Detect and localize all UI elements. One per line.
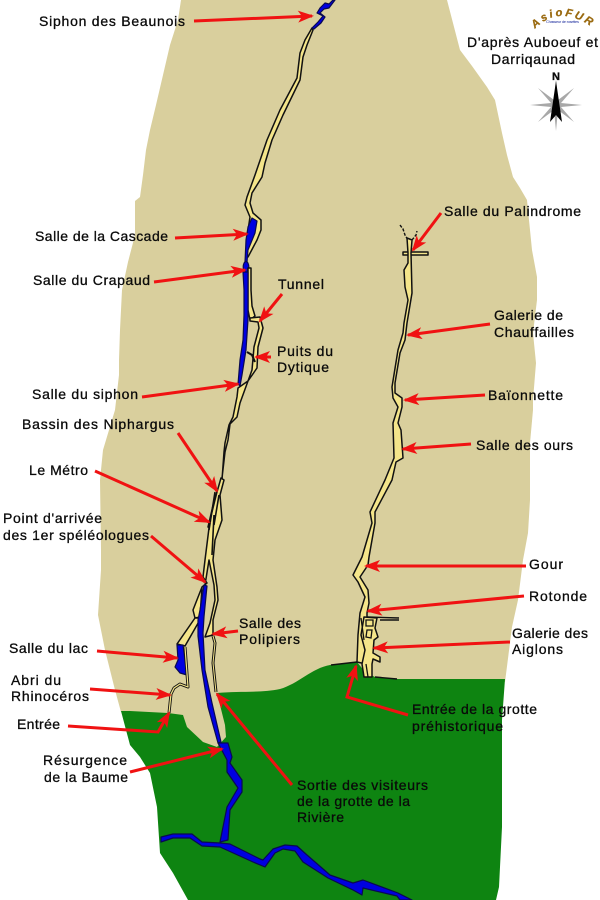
arrow: Tunnel — [260, 294, 282, 321]
green valley floor — [121, 662, 505, 900]
salle de la Cascade water — [245, 218, 257, 262]
arrow: Puits du Dytique — [256, 356, 271, 358]
aiglons inner walls — [361, 618, 373, 677]
palindrome crossbar — [403, 252, 428, 255]
label: Salle des ours: Salle des ours — [476, 437, 573, 453]
arrow: Galerie de Chauffailles — [408, 324, 490, 335]
arrow: Salle du Palindrome — [413, 213, 441, 250]
label: Entrée de la grotte préhistorique: préhistorique — [412, 718, 503, 734]
label: Salle des Polipiers: Salle des — [239, 615, 301, 631]
label: Salle des Polipiers: Polipiers — [239, 631, 300, 647]
label: Sortie des visiteurs: Rivière — [297, 809, 344, 825]
label: Galerie des Aiglons — [512, 625, 588, 657]
logo: Chasseur de rosettes — [546, 19, 579, 24]
label: Entrée de la grotte préhistorique — [412, 701, 537, 734]
label: Galerie des Aiglons: Galerie des — [512, 625, 588, 641]
arrow: Gour — [366, 564, 526, 568]
credit text — [467, 34, 598, 67]
arrow: Baïonnette — [405, 395, 485, 400]
lower right passage — [213, 636, 216, 692]
arrow: Abri du Rhinocéros — [90, 689, 170, 695]
label: Résurgence de la Baume — [43, 752, 128, 785]
icon: north compass — [530, 71, 582, 131]
label: Rotonde: Rotonde — [529, 588, 587, 604]
arrow: Résurgence — [130, 749, 222, 772]
label: Galerie de Chauffailles: Galerie de — [494, 307, 563, 323]
passage to salle du lac — [177, 618, 201, 646]
arrow: Sortie des visiteurs — [217, 694, 292, 785]
river outside the cave — [161, 743, 412, 900]
label: Résurgence de la Baume: de la Baume — [44, 769, 128, 785]
icon: north compass: N — [552, 71, 560, 83]
arrow: Point d'arrivée — [151, 536, 205, 582]
gallery wall bar — [367, 617, 399, 620]
label: Puits du Dytique: Dytique — [277, 359, 329, 375]
label: Gour: Gour — [529, 556, 563, 572]
label: Point d'arrivée: des 1er spéléologues — [3, 527, 149, 543]
puits du Dytique branch — [247, 352, 255, 362]
credit text: D'après Auboeuf et — [467, 34, 598, 50]
arrow: Siphon des Beaunois — [194, 16, 312, 21]
arrows — [68, 16, 526, 785]
arrow: Salle du lac — [97, 651, 177, 658]
label: Galerie de Chauffailles: Chauffailles — [494, 324, 574, 340]
label: Sortie des visiteurs: de la grotte de la — [297, 793, 410, 809]
label: Sortie des visiteurs: Sortie des visiteurs — [297, 777, 428, 793]
cave wall detail at le Métro — [209, 492, 219, 555]
label: Sortie des visiteurs — [297, 777, 428, 825]
label: Le Métro: Le Métro — [29, 462, 88, 478]
arrow: Salle des ours — [403, 444, 471, 449]
label: Résurgence de la Baume: Résurgence — [43, 752, 127, 768]
label: Abri du Rhinocéros: Abri du — [11, 672, 61, 688]
upper gallery — [245, 28, 313, 257]
arrow: Salle du siphon — [142, 384, 238, 397]
gallery by the siphon — [248, 268, 255, 320]
salle du Palindrome branches — [400, 225, 417, 240]
credit text: Darriqaunad — [491, 51, 575, 67]
label: Baïonnette: Baïonnette — [488, 387, 563, 403]
label: Tunnel: Tunnel — [278, 276, 324, 292]
label: Salle de la Cascade: Salle de la Cascade — [35, 228, 168, 244]
résurgence and tributary — [218, 743, 242, 842]
cave system: grotte de la Rivière — [169, 0, 335, 743]
label: Salle du lac: Salle du lac — [9, 640, 88, 656]
label: Abri du Rhinocéros — [11, 672, 89, 704]
arrow: Entrée de la grotte préhistorique — [347, 666, 408, 715]
label: Salle du siphon: Salle du siphon — [32, 386, 138, 402]
entrance passage and abri du Rhinocéros — [169, 647, 188, 713]
arrow: Rotonde — [368, 596, 524, 611]
label: Galerie de Chauffailles — [494, 307, 574, 340]
cave entrance lines — [331, 662, 397, 679]
label: Entrée de la grotte préhistorique: Entrée de la grotte — [412, 701, 537, 717]
cave system: grotte préhistorique — [331, 225, 428, 679]
label: Point d'arrivée: Point d'arrivée — [3, 510, 102, 526]
lower twin galleries — [193, 478, 224, 637]
main river — [161, 834, 412, 900]
label: Salle du Crapaud: Salle du Crapaud — [33, 272, 150, 288]
siphon des Beaunois water — [312, 0, 335, 29]
arrow: Salle du Crapaud — [154, 270, 245, 282]
logo: AsioFUR — [532, 8, 594, 30]
label: Siphon des Beaunois: Siphon des Beaunois — [39, 13, 185, 29]
salle du Crapaud water — [243, 262, 249, 272]
tunnel loop — [208, 317, 263, 528]
arrow: Salle de la Cascade — [175, 234, 247, 238]
arrow: Le Métro — [95, 471, 209, 522]
arrow: Galerie des Aiglons — [374, 642, 510, 648]
galerie des Aiglons — [361, 617, 380, 677]
plateau background — [98, 0, 537, 760]
label: Bassin des Niphargus: Bassin des Niphargus — [22, 416, 174, 432]
underground river — [198, 585, 221, 743]
siphon water — [238, 272, 248, 386]
label: Puits du Dytique — [277, 343, 333, 375]
label: Entrée: Entrée — [17, 716, 60, 732]
label: Salle du Palindrome: Salle du Palindrome — [444, 203, 581, 219]
label: Point d'arrivée — [3, 510, 149, 543]
arrow: Salle des Polipiers — [213, 631, 238, 634]
salle du lac water — [175, 645, 187, 675]
arrow: Entrée — [68, 713, 169, 732]
arrow: Bassin des Niphargus — [178, 433, 217, 491]
label: Abri du Rhinocéros: Rhinocéros — [11, 688, 89, 704]
label: Galerie des Aiglons: Aiglons — [512, 641, 563, 657]
label: Salle des Polipiers — [239, 615, 301, 647]
label: Puits du Dytique: Puits du — [277, 343, 333, 359]
long gallery — [353, 238, 412, 664]
